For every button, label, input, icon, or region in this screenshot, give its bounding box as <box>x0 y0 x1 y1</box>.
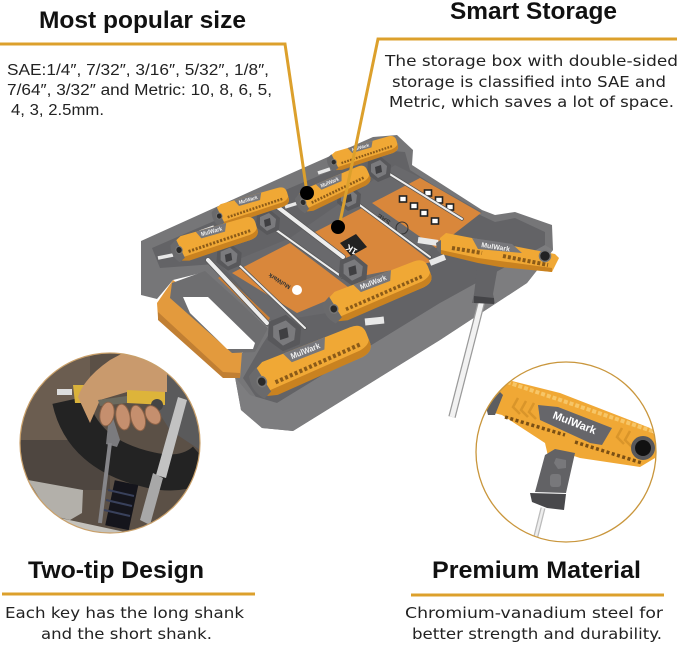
label <box>538 405 612 445</box>
hex socket <box>540 250 550 262</box>
t-handle 5: MulWark <box>359 275 388 291</box>
short tips <box>158 169 445 322</box>
divider: left <box>2 592 255 596</box>
handle grips <box>216 156 391 351</box>
photo: hand using key <box>20 353 205 540</box>
t-handle 3: MulWark <box>238 195 259 206</box>
long shanks <box>208 173 462 328</box>
heading: Most popular size: Most popular size <box>39 7 246 34</box>
photo: premium handle closeup: MulWark <box>551 410 598 437</box>
tray carrying handle <box>157 271 268 378</box>
photo: premium handle closeup <box>476 362 657 542</box>
orange panel: left <box>232 243 352 313</box>
text: storage: Metric, which saves a lot of space. <box>389 93 674 111</box>
t-handle 6 <box>245 323 375 403</box>
text: sizes: SAE:1/4″, 7/32″, 3/16″, 5/32″, 1/8″, <box>7 62 269 79</box>
tray front wall <box>235 245 553 431</box>
standalone t-handle key <box>436 233 559 417</box>
grip stem <box>472 262 498 303</box>
orange strip <box>218 274 270 324</box>
t-handle 4 <box>168 215 260 265</box>
t-handle 3 <box>210 186 291 229</box>
text: sizes: 4, 3, 2.5mm. <box>11 102 104 119</box>
orange panel: SAE <box>372 178 481 248</box>
orange body <box>490 381 657 467</box>
orange panel: center <box>315 208 432 276</box>
tray floor <box>152 150 545 403</box>
panel markings: MulWark <box>267 271 292 289</box>
label <box>472 238 522 253</box>
long shaft <box>452 300 482 417</box>
text: sizes: 7/64″, 3/32″ and Metric: 10, 8, 6, 5, <box>7 82 272 99</box>
text: two-tip: Each key has the long shank <box>5 604 244 622</box>
text: storage: The storage box with double-sided <box>384 52 678 70</box>
text: storage: storage is classified into SAE and <box>392 73 666 91</box>
tray body <box>141 135 553 431</box>
standalone t-handle key: MulWark <box>481 242 510 254</box>
t-handle 2 <box>292 164 374 216</box>
shaft <box>535 508 543 540</box>
t-handle 1 <box>325 135 400 173</box>
hex socket <box>631 436 655 460</box>
t-handle 5 <box>319 257 436 327</box>
chevrons <box>513 398 632 447</box>
heading: Premium Material: Premium Material <box>432 557 641 584</box>
text: two-tip: and the short shank. <box>41 625 212 643</box>
t-handle 4: MulWark <box>200 226 224 238</box>
panel markings <box>267 190 454 295</box>
callout lines <box>0 39 677 222</box>
text: material <box>405 604 664 643</box>
panel markings: 1K <box>344 242 359 257</box>
text: material: Chromium-vanadium steel for <box>405 604 664 622</box>
panel markings: SAE <box>376 212 392 225</box>
t-handle 2: MulWark <box>320 176 340 190</box>
text: storage <box>384 52 678 111</box>
handle body <box>440 233 559 272</box>
t-handle 1: MulWark <box>351 142 370 152</box>
callout dot: size <box>300 186 314 200</box>
text: material: better strength and durability. <box>412 625 662 643</box>
callout dot: storage <box>331 220 345 234</box>
text: two-tip <box>5 604 244 643</box>
storage tray <box>141 135 553 431</box>
grip <box>535 449 575 493</box>
heading: Two-tip Design: Two-tip Design <box>28 557 204 584</box>
text: sizes <box>7 62 272 119</box>
t-handle 6: MulWark <box>289 341 322 361</box>
central plate <box>222 165 482 320</box>
divider: right <box>411 594 664 596</box>
